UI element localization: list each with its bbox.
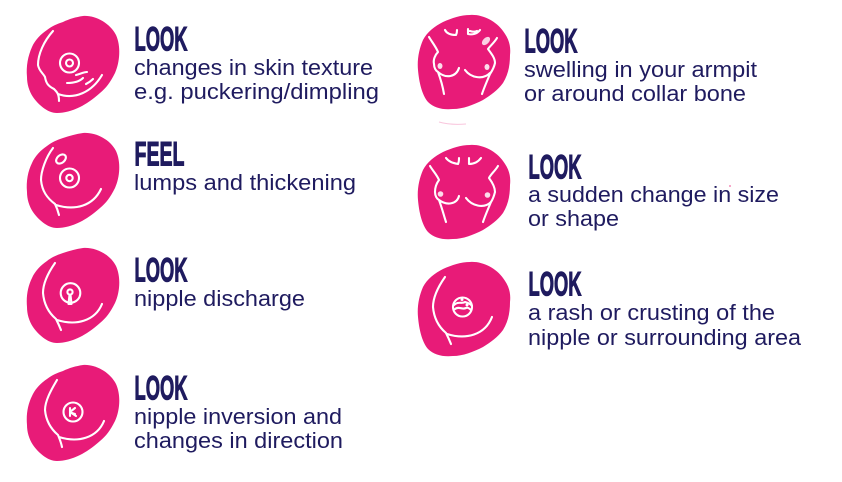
panel: inversion: [27, 365, 343, 461]
text block: nipple discharge: [134, 286, 305, 311]
icon: skin texture: [27, 16, 119, 113]
text block: a sudden change in size: [528, 182, 779, 207]
heading: LOOK: [524, 22, 578, 60]
panel: armpit swelling: or around collar bone: [524, 81, 746, 106]
panel: size or shape: [418, 145, 779, 239]
heading: FEEL: [134, 136, 184, 174]
panel: rash: [418, 262, 802, 356]
stray mark: [439, 122, 466, 124]
panel: skin texture: [27, 16, 379, 113]
heading: LOOK: [528, 266, 582, 304]
icon: size or shape: [418, 145, 510, 239]
text block: changes in skin texture: [134, 55, 373, 80]
text block: lumps and thickening: [134, 170, 356, 195]
heading: LOOK: [134, 20, 188, 58]
icon: rash: [418, 262, 510, 356]
icon: armpit swelling: [418, 15, 510, 109]
panel: rash: nipple or surrounding area: [528, 325, 802, 350]
panel: inversion: changes in direction: [134, 428, 343, 453]
text block: a rash or crusting of the: [528, 300, 775, 325]
text block: swelling in your armpit: [524, 57, 757, 82]
icon: lumps: [27, 133, 119, 228]
icon: discharge: [27, 248, 119, 343]
heading: LOOK: [528, 148, 582, 186]
panel: armpit swelling: [418, 15, 757, 124]
panel: discharge: [27, 248, 305, 343]
heading: LOOK: [134, 370, 188, 408]
panel: skin texture: e.g. puckering/dimpling: [134, 79, 379, 104]
panel: size or shape: or shape: [528, 206, 619, 231]
panel: lumps: [27, 133, 356, 228]
text block: nipple inversion and: [134, 404, 342, 429]
icon: inversion: [27, 365, 119, 461]
heading: LOOK: [134, 252, 188, 290]
stray mark: [729, 185, 731, 187]
